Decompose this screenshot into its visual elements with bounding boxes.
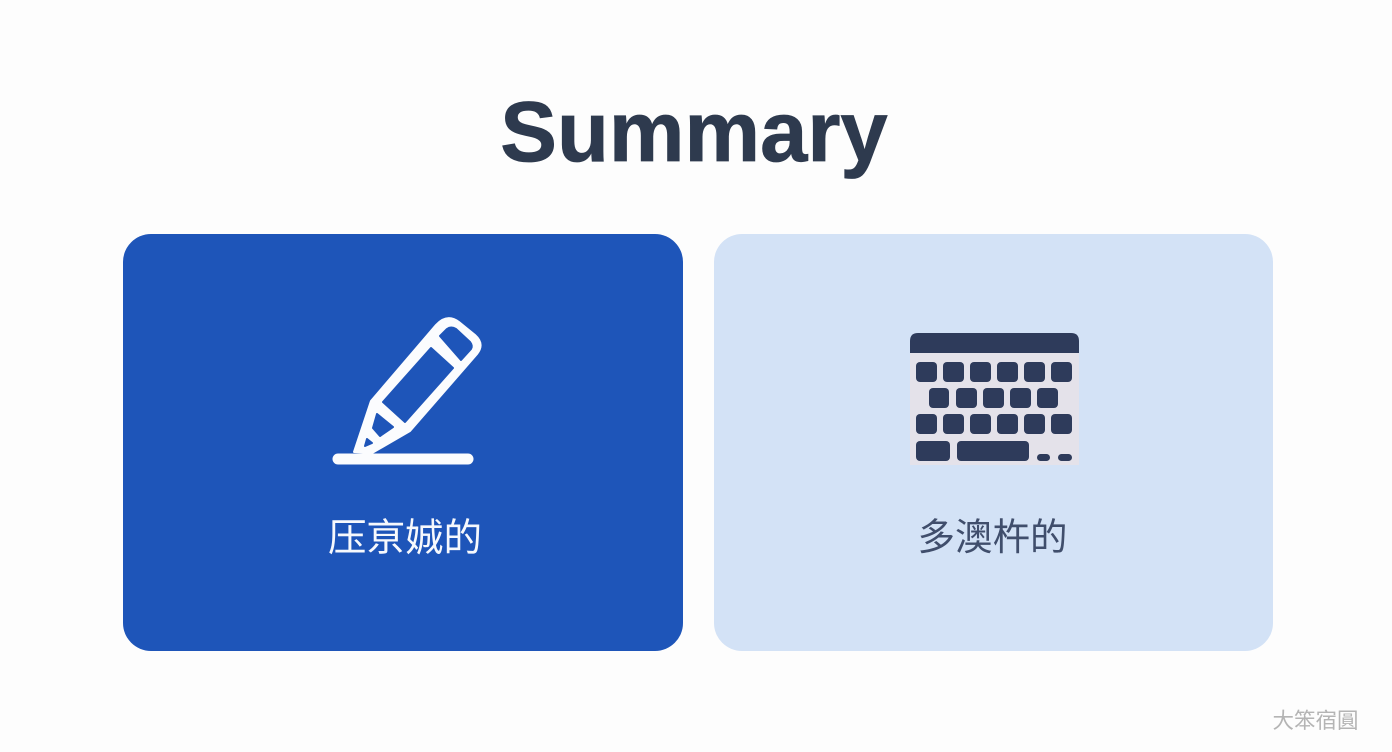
panel: keyboard card bbox=[714, 234, 1273, 651]
title: Summary bbox=[500, 85, 888, 180]
panel: pencil card bbox=[123, 234, 683, 651]
watermark: 大笨宿圓 bbox=[1272, 709, 1358, 733]
label: keyboard card: 多澳杵的 bbox=[918, 516, 1068, 558]
label: pencil card: 压亰娍的 bbox=[328, 517, 482, 560]
icon: pencil writing on a line bbox=[332, 317, 482, 464]
icon: keyboard bbox=[910, 333, 1079, 465]
